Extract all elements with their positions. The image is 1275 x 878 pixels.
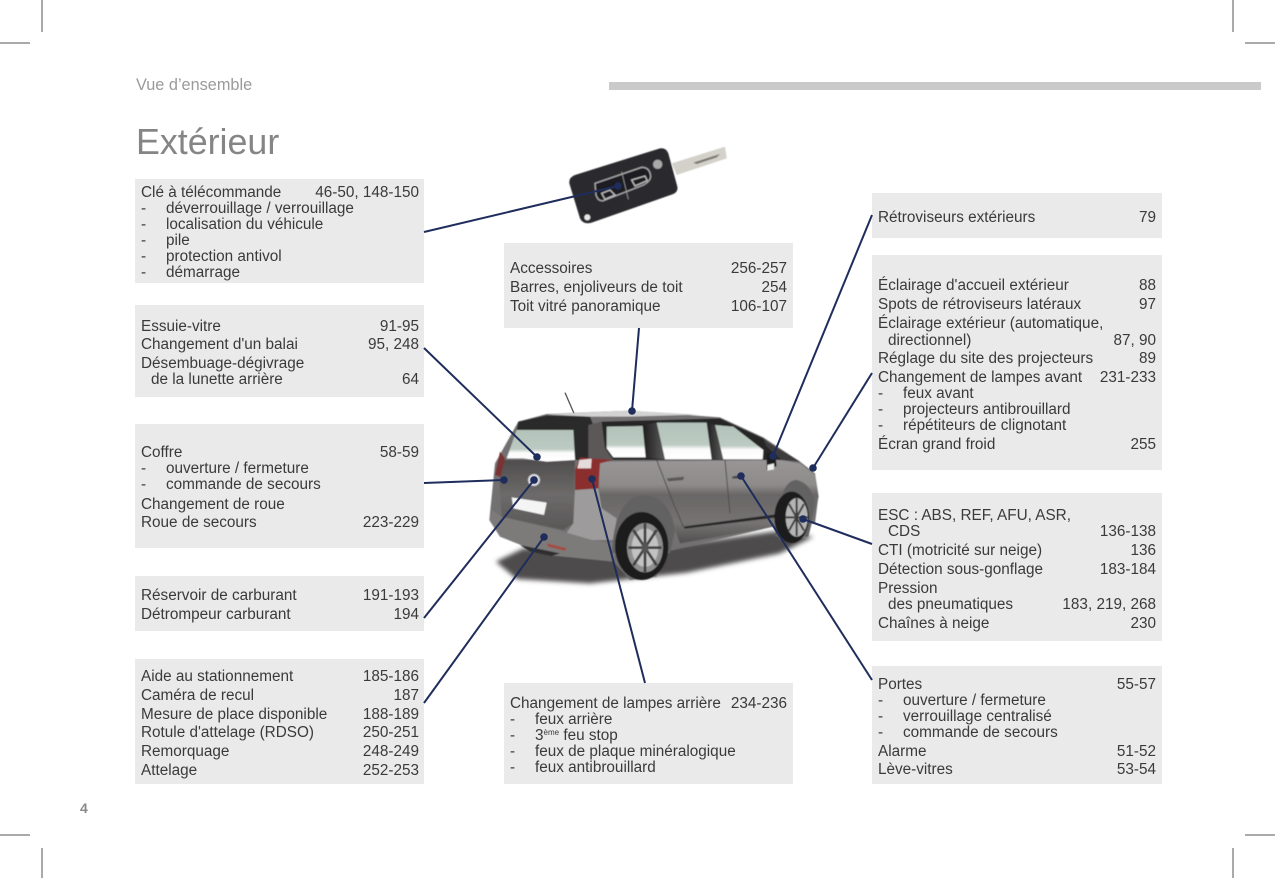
panel: essuie-vitre: 64 <box>402 371 419 388</box>
panel: coffre: - <box>141 476 146 493</box>
panel: lampes arrière <box>504 683 793 784</box>
callout lines and dots <box>424 182 872 703</box>
panel: lampes arrière: feux antibrouillard <box>535 759 656 776</box>
side panels <box>598 460 818 543</box>
panel: clé: démarrage <box>166 264 240 281</box>
panel: clé: - <box>141 200 146 217</box>
panel: réservoir: Réservoir de carburant <box>141 587 297 604</box>
front arch <box>775 480 815 537</box>
panel: éclairage: Écran grand froid <box>878 436 995 453</box>
panel: éclairage: directionnel) <box>888 332 971 349</box>
callout: ESC <box>799 515 872 544</box>
panel: clé: - <box>141 248 146 265</box>
panel: coffre: Changement de roue <box>141 496 285 513</box>
header bar <box>609 82 1261 90</box>
panel: aide au stationnement <box>135 659 424 784</box>
panel: lampes arrière: - <box>510 743 515 760</box>
title: Extérieur <box>136 122 279 162</box>
panel: portes: 51-52 <box>1117 743 1156 760</box>
rear roof and spoiler <box>517 415 593 460</box>
panel: aide au stationnement: 250-251 <box>363 724 419 741</box>
section label: Vue d’ensemble <box>136 76 252 94</box>
panel: ESC: 230 <box>1130 615 1156 632</box>
panel: éclairage: 255 <box>1130 436 1156 453</box>
panel: clé: localisation du véhicule <box>166 216 323 233</box>
panel: clé: - <box>141 232 146 249</box>
panel: essuie-vitre: de la lunette arrière <box>151 371 283 388</box>
callout: coffre <box>424 476 508 484</box>
panel: coffre: - <box>141 460 146 477</box>
panel: ESC: CTI (motricité sur neige) <box>878 542 1042 559</box>
panel: éclairage: Spots de rétroviseurs latéraux <box>878 296 1081 313</box>
shadow <box>496 532 813 583</box>
panel: portes: Alarme <box>878 743 926 760</box>
panel: ESC: Détection sous-gonflage <box>878 561 1043 578</box>
panel: réservoir: 194 <box>393 606 419 623</box>
rear window <box>507 430 575 462</box>
panel: rétroviseurs <box>872 193 1162 238</box>
panel: lampes arrière: feux arrière <box>535 711 612 728</box>
panel: aide au stationnement: 252-253 <box>363 762 419 779</box>
panel: éclairage: répétiteurs de clignotant <box>903 417 1066 434</box>
left tail light <box>495 452 505 477</box>
panel: rétroviseurs: 79 <box>1139 209 1156 226</box>
roof silver <box>547 411 700 417</box>
sill <box>683 514 778 529</box>
panel: ESC: 136 <box>1130 542 1156 559</box>
panel: réservoir <box>135 576 424 631</box>
panel: accessoires <box>504 243 793 328</box>
panel: éclairage: projecteurs antibrouillard <box>903 401 1071 418</box>
panel: éclairage: 231-233 <box>1100 369 1156 386</box>
side window frame <box>602 418 788 460</box>
rear arch <box>612 495 675 553</box>
panel: portes: Portes <box>878 676 922 693</box>
panel: portes: 53-54 <box>1117 761 1156 778</box>
panel: portes: 55-57 <box>1117 676 1156 693</box>
panel: aide au stationnement: 248-249 <box>363 743 419 760</box>
C pillar <box>588 422 613 460</box>
panel: portes: verrouillage centralisé <box>903 708 1052 725</box>
panel: éclairage: - <box>878 417 883 434</box>
panel: aide au stationnement: Aide au stationnement <box>141 668 293 685</box>
panel: accessoires: 106-107 <box>731 298 787 315</box>
panel: éclairage: 87, 90 <box>1113 332 1156 349</box>
panel: aide au stationnement: 188-189 <box>363 706 419 723</box>
callout: accessoires <box>628 328 639 415</box>
callout: rétroviseurs <box>769 215 872 460</box>
mirror <box>767 452 777 470</box>
panel: coffre: Roue de secours <box>141 514 257 531</box>
plate <box>512 497 547 515</box>
panel: accessoires: 254 <box>761 279 787 296</box>
panel: ESC: 183, 219, 268 <box>1062 596 1156 613</box>
panel: coffre: 223-229 <box>363 514 419 531</box>
panel: aide au stationnement: 185-186 <box>363 668 419 685</box>
panel: aide au stationnement: 187 <box>393 687 419 704</box>
whole body <box>489 411 819 580</box>
panel: ESC: CDS <box>888 523 920 540</box>
panel: clé: protection antivol <box>166 248 282 265</box>
panel: essuie-vitre: Changement d'un balai <box>141 336 298 353</box>
panel: éclairage: Éclairage d'accueil extérieur <box>878 277 1069 294</box>
door seams <box>657 460 730 527</box>
panel: portes: - <box>878 692 883 709</box>
panel: éclairage: Réglage du site des projecteurs <box>878 350 1093 367</box>
panel: coffre: commande de secours <box>166 476 321 493</box>
panel: éclairage: 88 <box>1139 277 1156 294</box>
panel: éclairage <box>872 255 1162 470</box>
panel: accessoires: Accessoires <box>510 260 592 277</box>
side windows <box>607 426 646 457</box>
panel: clé: pile <box>166 232 190 249</box>
panel: aide au stationnement: Attelage <box>141 762 197 779</box>
panel: coffre: Coffre <box>141 444 182 461</box>
panel: coffre <box>135 424 424 548</box>
panel: portes: - <box>878 708 883 725</box>
callout: éclairage <box>809 373 872 472</box>
panel: portes: ouverture / fermeture <box>903 692 1046 709</box>
panel: ESC: des pneumatiques <box>888 596 1013 613</box>
panel: éclairage: feux avant <box>903 385 974 402</box>
panel: accessoires: Barres, enjoliveurs de toit <box>510 279 683 296</box>
panel: ESC: Pression <box>878 580 938 597</box>
panel: clé: Clé à télécommande <box>141 184 281 201</box>
callout: essuie-vitre <box>424 348 541 461</box>
panel: coffre: 58-59 <box>380 444 419 461</box>
panel: essuie-vitre <box>135 305 424 397</box>
panel: lampes arrière: - <box>510 711 515 728</box>
page number: 4 <box>80 800 88 816</box>
rear quarter <box>565 488 617 540</box>
panel: clé: - <box>141 264 146 281</box>
panel: aide au stationnement: Caméra de recul <box>141 687 254 704</box>
callout: portes <box>737 472 872 680</box>
panel: essuie-vitre: 91-95 <box>380 318 419 335</box>
bumper <box>489 510 617 562</box>
callout: aide au stationnement <box>424 533 548 703</box>
panel: portes: - <box>878 724 883 741</box>
panel: ESC <box>872 493 1162 641</box>
panel: éclairage: - <box>878 385 883 402</box>
panel: éclairage: Éclairage extérieur (automatique, <box>878 315 1103 332</box>
callout: clé <box>424 182 622 232</box>
panel: ESC: Chaînes à neige <box>878 615 989 632</box>
callout: réservoir <box>424 476 538 618</box>
panel: clé <box>135 179 424 283</box>
panel: aide au stationnement: Remorquage <box>141 743 229 760</box>
panel: essuie-vitre: 95, 248 <box>368 336 419 353</box>
rear hatch <box>498 460 575 530</box>
panel: lampes arrière: 3ème feu stop <box>535 727 618 744</box>
panel: lampes arrière: Changement de lampes arrière <box>510 695 721 712</box>
panel: portes <box>872 666 1162 784</box>
panel: lampes arrière: 234-236 <box>731 695 787 712</box>
panel: clé: - <box>141 216 146 233</box>
panel: éclairage: - <box>878 401 883 418</box>
panel: accessoires: 256-257 <box>731 260 787 277</box>
panel: aide au stationnement: Rotule d'attelage (RDSO) <box>141 724 314 741</box>
panel: ESC: 183-184 <box>1100 561 1156 578</box>
panel: lampes arrière: - <box>510 759 515 776</box>
panel: essuie-vitre: Essuie-vitre <box>141 318 221 335</box>
pillars <box>643 423 665 459</box>
panel: rétroviseurs: Rétroviseurs extérieurs <box>878 209 1035 226</box>
panel: réservoir: Détrompeur carburant <box>141 606 291 623</box>
panel: clé: déverrouillage / verrouillage <box>166 200 354 217</box>
panel: réservoir: 191-193 <box>363 587 419 604</box>
panel: portes: commande de secours <box>903 724 1058 741</box>
panel: essuie-vitre: Désembuage-dégivrage <box>141 355 304 372</box>
panel: lampes arrière: - <box>510 727 515 744</box>
panel: éclairage: 97 <box>1139 296 1156 313</box>
panel: accessoires: Toit vitré panoramique <box>510 298 660 315</box>
panel: ESC: ESC : ABS, REF, AFU, ASR, <box>878 507 1071 524</box>
tail light <box>575 457 613 490</box>
panel: éclairage: Changement de lampes avant <box>878 369 1082 386</box>
panel: coffre: ouverture / fermeture <box>166 460 309 477</box>
callout: lampes arrière <box>588 475 645 683</box>
panel: portes: Lève-vitres <box>878 761 953 778</box>
panel: éclairage: 89 <box>1139 350 1156 367</box>
panel: clé: 46-50, 148-150 <box>315 184 419 201</box>
panel: lampes arrière: feux de plaque minéralogique <box>535 743 736 760</box>
panel: aide au stationnement: Mesure de place disponible <box>141 706 327 723</box>
panel: ESC: 136-138 <box>1100 523 1156 540</box>
